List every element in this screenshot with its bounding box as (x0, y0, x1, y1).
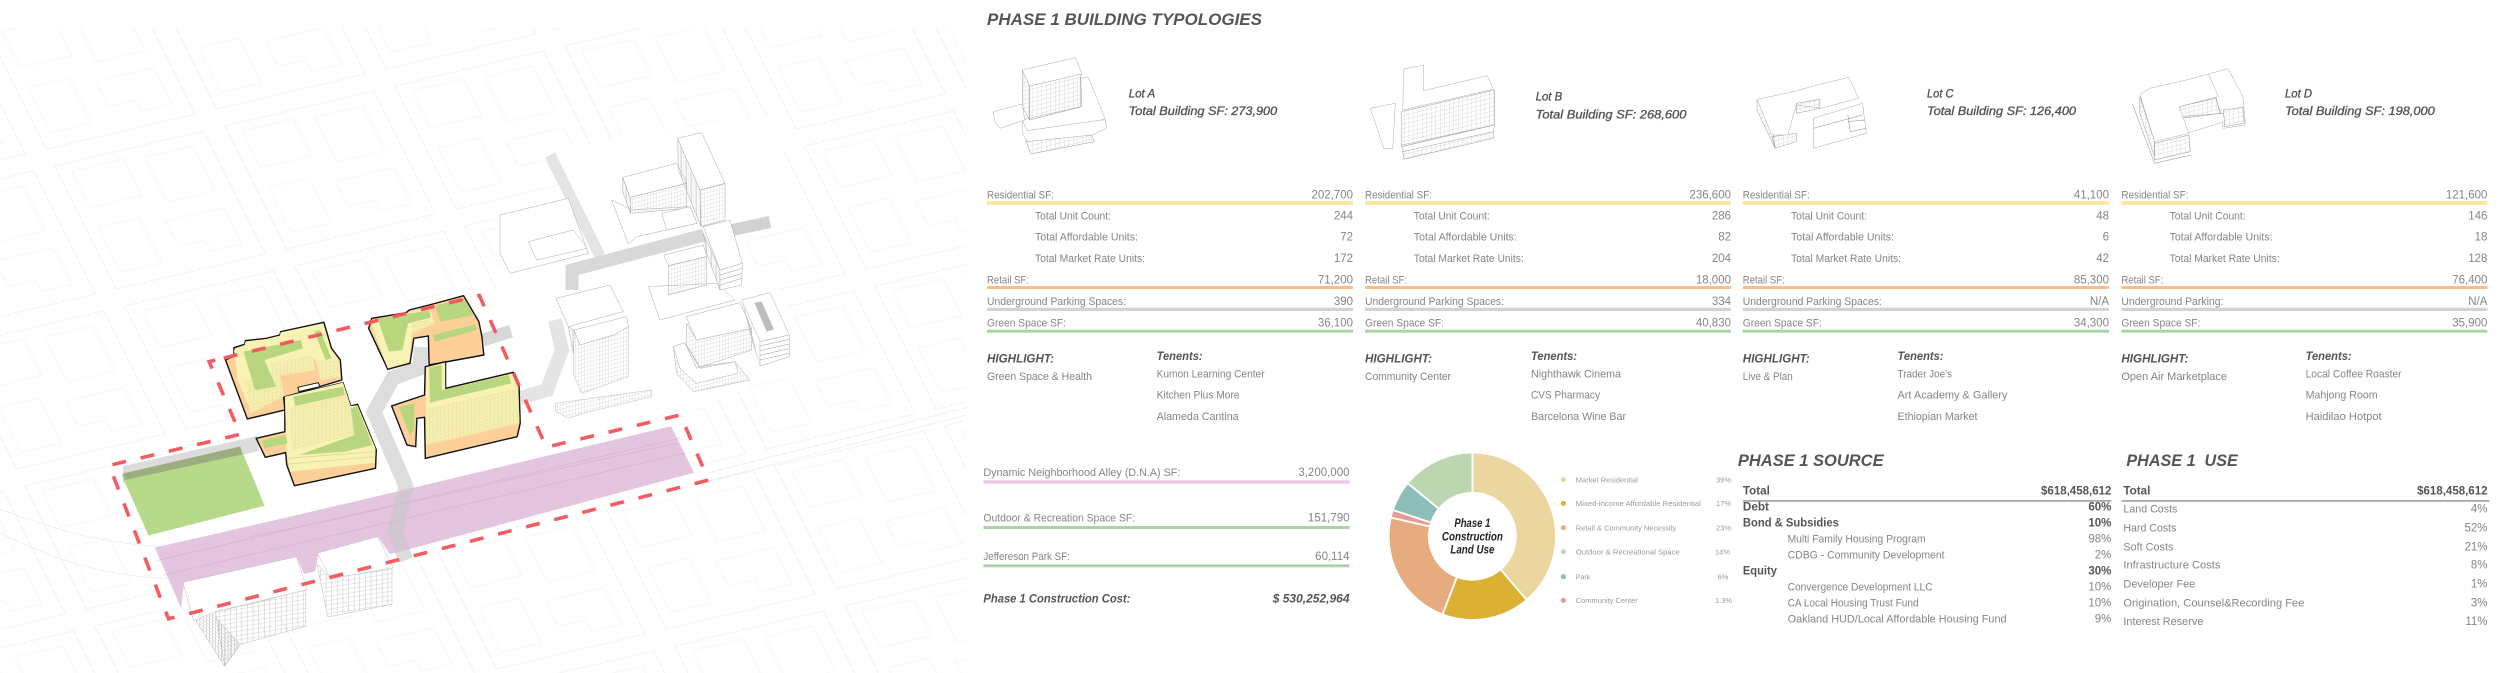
Lot C tenants: Tenents: (1898, 349, 1944, 363)
legend: park: Park (1576, 572, 1590, 581)
row: D.N.A alley (983, 467, 1350, 484)
row: hard costs: 52% (2464, 522, 2488, 534)
Lot B tenants: Tenents: (1531, 349, 1577, 363)
Lot A building (256, 383, 376, 486)
Lot D highlight: Open Air Marketplace (2121, 371, 2227, 383)
row: multi family housing program (1788, 534, 2111, 546)
Lot D stats table (2121, 189, 2488, 333)
row: green space (2121, 317, 2487, 333)
row: Jefferson park: Jeffereson Park SF: (983, 551, 1070, 563)
row: Jefferson park (983, 551, 1350, 567)
row: use total: Total (2123, 485, 2150, 497)
row: equity: Equity (1743, 566, 1777, 578)
Lot B name and total: Lot B (1536, 89, 1562, 103)
row: green space: Green Space SF: (1365, 317, 1444, 329)
icon: Lot A massing thumbnail (993, 58, 1107, 154)
row: soft costs: Soft Costs (2123, 541, 2174, 553)
row: green space: 40,830 (1696, 317, 1731, 329)
Lot B building (392, 362, 520, 458)
row: infrastructure costs: Infrastructure Costs (2123, 560, 2221, 572)
Lot D highlight (2121, 351, 2227, 383)
icon: Lot B massing thumbnail (1370, 65, 1495, 159)
donut center label (1442, 518, 1503, 557)
center tower (648, 220, 742, 320)
row: source total: $618,458,612 (2041, 486, 2111, 498)
row: affordable units: 6 (2103, 232, 2109, 244)
lower right curved building (673, 293, 789, 392)
Lot C tenants: Art Academy & Gallery (1898, 390, 2008, 402)
Lot D highlight: HIGHLIGHT: (2121, 351, 2188, 365)
row: total unit count: Total Unit Count: (1791, 210, 1867, 222)
left lower tower (183, 557, 307, 666)
row: CDBG (1788, 550, 2111, 562)
Lot B tenants (1531, 349, 1626, 423)
legend: community center (1561, 596, 1732, 605)
donut legend (1561, 475, 1732, 605)
Lot A tenants: Kitchen Plus More (1157, 390, 1240, 402)
Lot D tenants: Tenents: (2306, 349, 2352, 363)
row: convergence development: Convergence Development LLC (1788, 582, 1933, 594)
row: total unit count: 244 (1334, 210, 1354, 222)
row: affordable units: 18 (2475, 232, 2487, 244)
legend: retail: 23% (1716, 523, 1731, 532)
row: retail SF (1365, 274, 1731, 289)
row: market rate units (1035, 253, 1353, 265)
row: soft costs: 21% (2464, 541, 2488, 553)
row: affordable units (2170, 232, 2487, 244)
Lot A highlight (987, 351, 1092, 383)
Lot B tenants: Nighthawk Cinema (1531, 368, 1622, 380)
row: use total: $618,458,612 (2417, 485, 2488, 497)
row: parking: 390 (1334, 296, 1353, 308)
low podium building (500, 198, 588, 273)
segment: retail and community necessity (1389, 518, 1457, 614)
heading: Phase 1 use: PHASE 1 USE (2126, 452, 2239, 470)
row: retail SF: 71,200 (1318, 274, 1353, 286)
row: debt: 60% (2088, 502, 2111, 514)
row: green space: Green Space SF: (2121, 317, 2200, 329)
row: CA local housing trust: CA Local Housing Trust Fund (1788, 598, 1919, 610)
Phase 1 colored building blocks (226, 296, 520, 486)
row: affordable units (1414, 232, 1731, 244)
legend: outdoor: 14% (1715, 547, 1730, 556)
Lot C highlight: HIGHLIGHT: (1743, 351, 1810, 365)
row: CA local housing trust (1788, 598, 2111, 610)
row: interest reserve: Interest Reserve (2123, 616, 2203, 628)
row: total unit count (1035, 210, 1354, 222)
Lot A tenants (1157, 349, 1265, 423)
Lot C highlight: Live & Plan (1743, 371, 1793, 383)
row: green space: 34,300 (2074, 317, 2109, 329)
row: parking: Underground Parking: (2121, 296, 2223, 308)
icon: Lot D massing thumbnail (2132, 69, 2245, 163)
lower towers fronting the alley (183, 537, 393, 666)
row: total unit count: 48 (2096, 210, 2109, 222)
row: retail SF: Retail SF: (2121, 274, 2163, 286)
D.N.A alley purple strip (155, 426, 694, 608)
row: developer fee: 1% (2471, 579, 2488, 591)
row: retail SF: Retail SF: (1743, 274, 1785, 286)
Lot C stats table (1743, 189, 2109, 333)
row: residential SF: 121,600 (2446, 189, 2487, 201)
row: equity (1743, 566, 2111, 578)
row: retail SF (2121, 274, 2487, 289)
Lot A tenants: Kumon Learning Center (1157, 368, 1265, 380)
row: green space: Green Space SF: (987, 317, 1066, 329)
row: developer fee (2123, 579, 2488, 591)
pedestrian alleys (374, 155, 770, 560)
row: convergence development: 10% (2088, 582, 2111, 594)
row: source total (1743, 486, 2111, 502)
row: market rate units: 128 (2468, 253, 2487, 265)
legend: market residential: Market Residential (1576, 475, 1638, 484)
Lot A highlight: HIGHLIGHT: (987, 351, 1054, 365)
row: bond and subsidies: Bond & Subsidies (1743, 518, 1839, 530)
row: affordable units: 82 (1718, 232, 1731, 244)
row: market rate units: 42 (2096, 253, 2109, 265)
row: residential SF: 41,100 (2074, 189, 2109, 201)
Lot D building (226, 322, 342, 419)
legend: park (1561, 572, 1729, 581)
legend: mixed-income affordable: Mixed-income Affordable Residential (1576, 499, 1701, 508)
Lot B highlight: Community Center (1365, 371, 1451, 383)
row: affordable units: Total Affordable Units: (1414, 232, 1517, 244)
row: origination fee: Origination, Counsel&Recording Fee (2123, 597, 2304, 609)
row: outdoor and recreation: Outdoor & Recreation Space SF: (983, 512, 1135, 524)
row: parking: Underground Parking Spaces: (987, 296, 1126, 308)
row: origination fee (2123, 597, 2488, 609)
row: CDBG: 2% (2095, 550, 2111, 562)
Lot C building (369, 296, 484, 369)
row: infrastructure costs (2123, 560, 2488, 572)
row: parking: N/A (2468, 296, 2488, 308)
row: interest reserve (2123, 616, 2488, 628)
donut center label: Phase 1 (1454, 518, 1490, 530)
Lot D name and total: Lot D (2285, 86, 2312, 100)
row: green space (1743, 317, 2109, 333)
legend: market residential: 39% (1716, 475, 1731, 484)
row: total unit count: 146 (2468, 210, 2487, 222)
row: total unit count (1414, 210, 1731, 222)
row: affordable units (1791, 232, 2109, 244)
row: debt (1743, 502, 2111, 514)
row: green space: 36,100 (1318, 317, 1353, 329)
donut center label: Construction (1442, 531, 1503, 543)
donut center label: Land Use (1450, 545, 1495, 557)
row: Oakland HUD: Oakland HUD/Local Affordable Housing Fund (1788, 614, 2007, 626)
Jefferson park green (122, 446, 265, 536)
Lot C tenants (1898, 349, 2008, 423)
row: market rate units (1414, 253, 1732, 265)
Lot D tenants (2306, 349, 2402, 423)
row: residential SF: 202,700 (1311, 189, 1353, 201)
Lot C name and total (1927, 86, 2076, 118)
row: affordable units: Total Affordable Units: (1791, 232, 1894, 244)
row: residential SF: Residential SF: (1743, 189, 1810, 201)
gray connector strip at park (123, 436, 259, 483)
row: residential SF (1743, 189, 2109, 205)
row: total unit count: Total Unit Count: (1035, 210, 1111, 222)
row: market rate units: Total Market Rate Units: (1035, 253, 1145, 265)
icon: Lot C massing thumbnail (1757, 77, 1866, 148)
row: affordable units: Total Affordable Units: (2170, 232, 2273, 244)
row: total unit count: Total Unit Count: (1414, 210, 1490, 222)
row: retail SF: 85,300 (2074, 274, 2109, 286)
Lot D tenants: Haidilao Hotpot (2306, 411, 2382, 423)
row: retail SF (1743, 274, 2109, 289)
row: affordable units (1035, 232, 1353, 244)
row: residential SF (2121, 189, 2487, 205)
Lot B tenants: CVS Pharmacy (1531, 390, 1600, 402)
segment: community center (1391, 510, 1431, 526)
row: green space: 35,900 (2452, 317, 2487, 329)
row: source total: Total (1743, 486, 1770, 498)
legend: outdoor: Outdoor & Recreational Space (1576, 547, 1680, 556)
row: infrastructure costs: 8% (2471, 560, 2488, 572)
row: parking (1743, 296, 2109, 311)
donut chart: land use (1389, 453, 1556, 620)
row: parking (987, 296, 1353, 311)
city block context linework (0, 0, 966, 673)
segment: park (1393, 483, 1439, 523)
legend: park: 6% (1718, 572, 1729, 581)
row: outdoor and recreation: 151,790 (1308, 512, 1350, 524)
legend: mixed-income affordable: 17% (1716, 499, 1731, 508)
row: retail SF: 18,000 (1696, 274, 1731, 286)
row: convergence development (1788, 582, 2111, 594)
panel: Lot C (1743, 77, 2109, 423)
panel: Lot D (2121, 69, 2488, 423)
Lot B name and total: Total Building SF: 268,600 (1536, 108, 1687, 122)
Lot B name and total (1536, 89, 1687, 122)
panel: Phase 1 use (2121, 452, 2490, 628)
row: market rate units: Total Market Rate Units: (2170, 253, 2280, 265)
Lot A name and total: Total Building SF: 273,900 (1129, 104, 1278, 118)
Lot C tenants: Trader Joe's (1898, 368, 1952, 380)
row: total unit count: 286 (1712, 210, 1731, 222)
row: CDBG: CDBG - Community Development (1788, 550, 1945, 562)
legend: retail (1561, 523, 1731, 532)
right lower tower (317, 537, 393, 617)
row: market rate units: 204 (1712, 253, 1732, 265)
panel: Lot B (1365, 65, 1732, 423)
panel: Phase 1 source (1738, 452, 2111, 626)
row: parking: 334 (1712, 296, 1732, 308)
legend: community center: 1.3% (1715, 596, 1732, 605)
Lot B highlight (1365, 351, 1451, 383)
legend: community center: Community Center (1576, 596, 1638, 605)
row: Jefferson park: 60,114 (1315, 551, 1350, 563)
row: retail SF: Retail SF: (987, 274, 1029, 286)
row: residential SF: Residential SF: (987, 189, 1054, 201)
row: equity: 30% (2088, 566, 2111, 578)
row: Oakland HUD (1788, 614, 2111, 626)
Lot A name and total: Lot A (1129, 86, 1155, 100)
row: CA local housing trust: 10% (2088, 598, 2111, 610)
row: land costs (2123, 504, 2488, 516)
row: parking: Underground Parking Spaces: (1743, 296, 1882, 308)
segment: outdoor and recreational (1408, 453, 1472, 509)
Lot D name and total (2285, 86, 2435, 118)
panel: site totals (983, 467, 1350, 606)
panel: Lot A (987, 58, 1354, 423)
row: total unit count: Total Unit Count: (2170, 210, 2246, 222)
row: origination fee: 3% (2471, 597, 2488, 609)
legend: outdoor (1561, 547, 1730, 556)
row: green space (987, 317, 1353, 333)
panel: site axonometric map (0, 0, 970, 673)
site ground clearing (0, 115, 970, 619)
row: multi family housing program: 98% (2088, 534, 2111, 546)
row: retail SF: Retail SF: (1365, 274, 1407, 286)
Lot B highlight: HIGHLIGHT: (1365, 351, 1432, 365)
row: retail SF: 76,400 (2452, 274, 2487, 286)
segment: market residential (1472, 453, 1556, 600)
row: affordable units: 72 (1340, 232, 1353, 244)
row: market rate units: Total Market Rate Units: (1791, 253, 1901, 265)
row: green space (1365, 317, 1731, 333)
Lot A name and total (1129, 86, 1278, 118)
Lot D name and total: Total Building SF: 198,000 (2285, 104, 2435, 118)
segment: mixed-income affordable (1442, 569, 1527, 620)
row: retail SF (987, 274, 1353, 289)
row: total unit count (1791, 210, 2109, 222)
row: residential SF: Residential SF: (2121, 189, 2188, 201)
row: construction cost: Phase 1 Construction Cost: (983, 592, 1130, 606)
podium and slab tower (612, 133, 725, 244)
Lot C name and total: Total Building SF: 126,400 (1927, 104, 2076, 118)
row: Oakland HUD: 9% (2095, 614, 2111, 626)
Lot C name and total: Lot C (1927, 86, 1954, 100)
red dashed site boundary (109, 295, 708, 619)
row: market rate units: 172 (1334, 253, 1353, 265)
Lot D tenants: Mahjong Room (2306, 390, 2378, 402)
row: affordable units: Total Affordable Units: (1035, 232, 1138, 244)
row: construction cost (983, 592, 1350, 606)
row: residential SF (987, 189, 1353, 205)
legend: market residential (1561, 475, 1731, 484)
Lot C highlight (1743, 351, 1810, 383)
row: use total (2121, 485, 2490, 502)
row: residential SF: 236,600 (1689, 189, 1731, 201)
Lot A highlight: Green Space & Health (987, 371, 1092, 383)
Lot D tenants: Local Coffee Roaster (2306, 368, 2402, 380)
Lot B stats table (1365, 189, 1732, 333)
row: market rate units (1791, 253, 2109, 265)
heading: Phase 1 source: PHASE 1 SOURCE (1738, 452, 1885, 470)
row: debt: Debt (1743, 502, 1769, 514)
row: D.N.A alley: Dynamic Neighborhood Alley (D.N.A) SF: (983, 467, 1180, 479)
title: Phase 1 building typologies: PHASE 1 BUILDING TYPOLOGIES (987, 11, 1262, 29)
row: multi family housing program: Multi Family Housing Program (1788, 534, 1926, 546)
row: residential SF (1365, 189, 1731, 205)
legend: retail: Retail & Community Necessity (1576, 523, 1677, 532)
upper right context buildings (500, 133, 789, 418)
row: outdoor and recreation (983, 512, 1350, 529)
row: green space: Green Space SF: (1743, 317, 1822, 329)
row: D.N.A alley: 3,200,000 (1298, 467, 1350, 479)
row: residential SF: Residential SF: (1365, 189, 1432, 201)
row: parking: N/A (2090, 296, 2109, 308)
Lot A tenants: Alameda Cantina (1157, 411, 1239, 423)
tall tower near site (556, 285, 652, 418)
Lot A stats table (987, 189, 1354, 333)
row: land costs: Land Costs (2123, 504, 2178, 516)
row: soft costs (2123, 541, 2488, 553)
row: developer fee: Developer Fee (2123, 579, 2195, 591)
row: hard costs: Hard Costs (2123, 522, 2177, 534)
row: land costs: 4% (2471, 504, 2488, 516)
row: parking (1365, 296, 1732, 311)
row: total unit count (2170, 210, 2487, 222)
Lot B tenants: Barcelona Wine Bar (1531, 411, 1626, 423)
Lot A tenants: Tenents: (1157, 349, 1203, 363)
row: hard costs (2123, 522, 2488, 534)
Lot C tenants: Ethiopian Market (1898, 411, 1978, 423)
row: parking (2121, 296, 2488, 311)
row: parking: Underground Parking Spaces: (1365, 296, 1504, 308)
row: bond and subsidies: 10% (2088, 518, 2111, 530)
row: market rate units (2170, 253, 2487, 265)
row: bond and subsidies (1743, 518, 2111, 530)
row: market rate units: Total Market Rate Units: (1414, 253, 1524, 265)
row: construction cost: $ 530,252,964 (1272, 592, 1350, 606)
row: interest reserve: 11% (2465, 616, 2488, 628)
